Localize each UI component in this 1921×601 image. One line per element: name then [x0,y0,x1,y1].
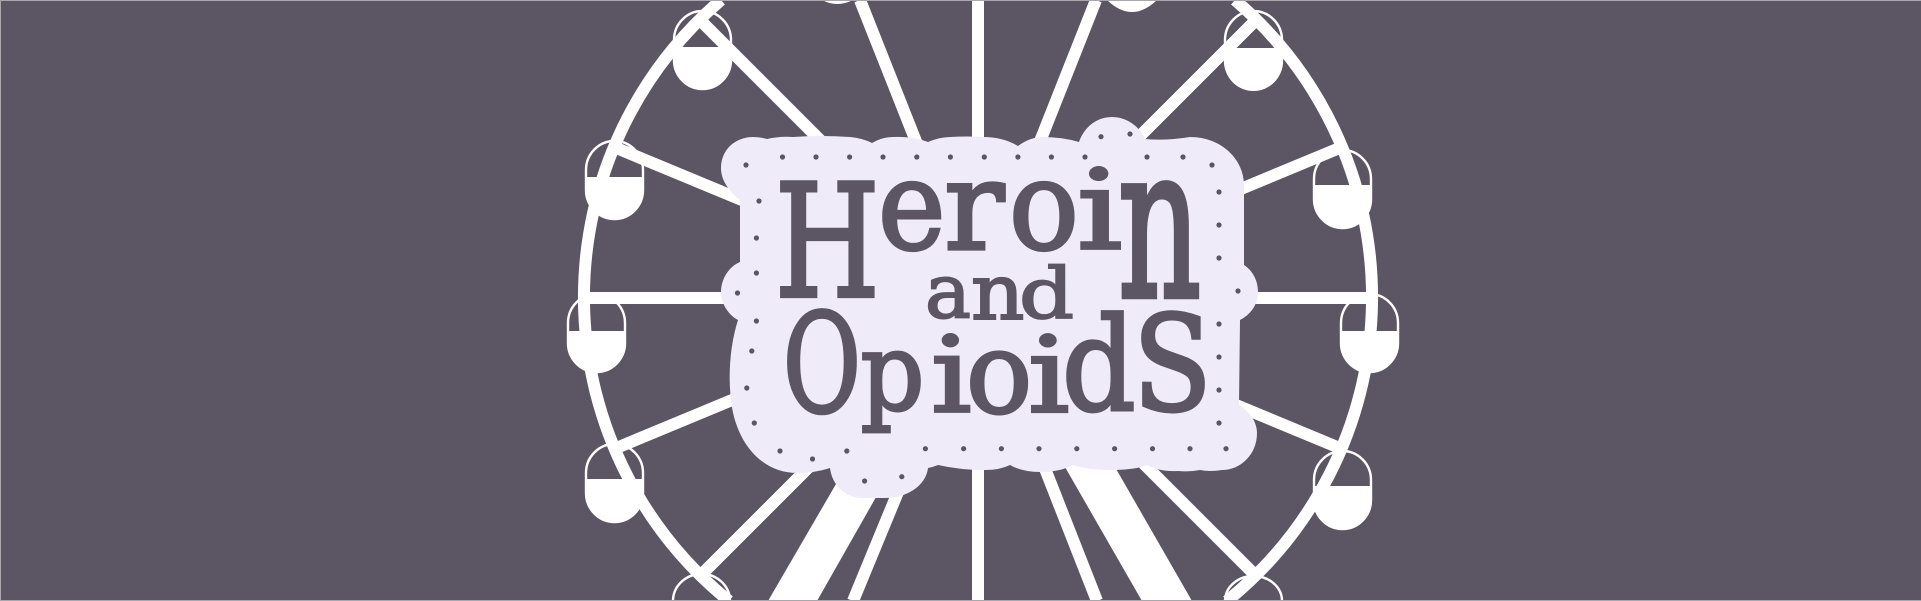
gondola: upper left [585,141,644,220]
gondola: middle right [1340,294,1399,373]
plaque dotted border [735,131,1241,484]
support leg: right [969,300,1192,601]
title: and: d [1019,253,1074,335]
title: Heroin: H [775,151,880,334]
gondola: bottom right [1225,576,1282,601]
title: Heroin: r [944,133,1004,279]
title: Opioids: i [931,314,972,437]
title: Opioids: d [1062,290,1136,441]
title: Heroin [775,98,1201,347]
title: Heroin: o [1009,133,1079,279]
title: and: n [971,247,1024,337]
title: and: a [925,248,971,336]
gondola: lower left [585,444,644,523]
title: and [925,247,1074,337]
gondola: upper right [1313,150,1372,229]
title: Opioids [783,284,1211,444]
wheel spokes [584,0,1372,601]
title: Heroin: i [1076,146,1122,275]
gondola: top left [673,11,732,90]
title: Opioids: p [860,309,925,435]
title: Opioids: i [1028,314,1070,437]
title: Heroin: n [1118,98,1201,347]
title: Opioids: S [1132,287,1211,441]
scalloped title plaque [721,117,1258,498]
wheel rim [584,0,1372,601]
title: Opioids: o [966,307,1032,439]
support leg: left [768,300,988,601]
gondola: bottom left [673,574,730,601]
gondola: top centre left [822,0,853,4]
gondola: top right [1224,11,1283,91]
gondola: lower right [1313,451,1372,530]
title: Heroin: e [878,133,945,279]
gondola: middle left [567,294,626,373]
title: Opioids: O [783,284,861,444]
gondola: top centre right [1107,0,1157,12]
